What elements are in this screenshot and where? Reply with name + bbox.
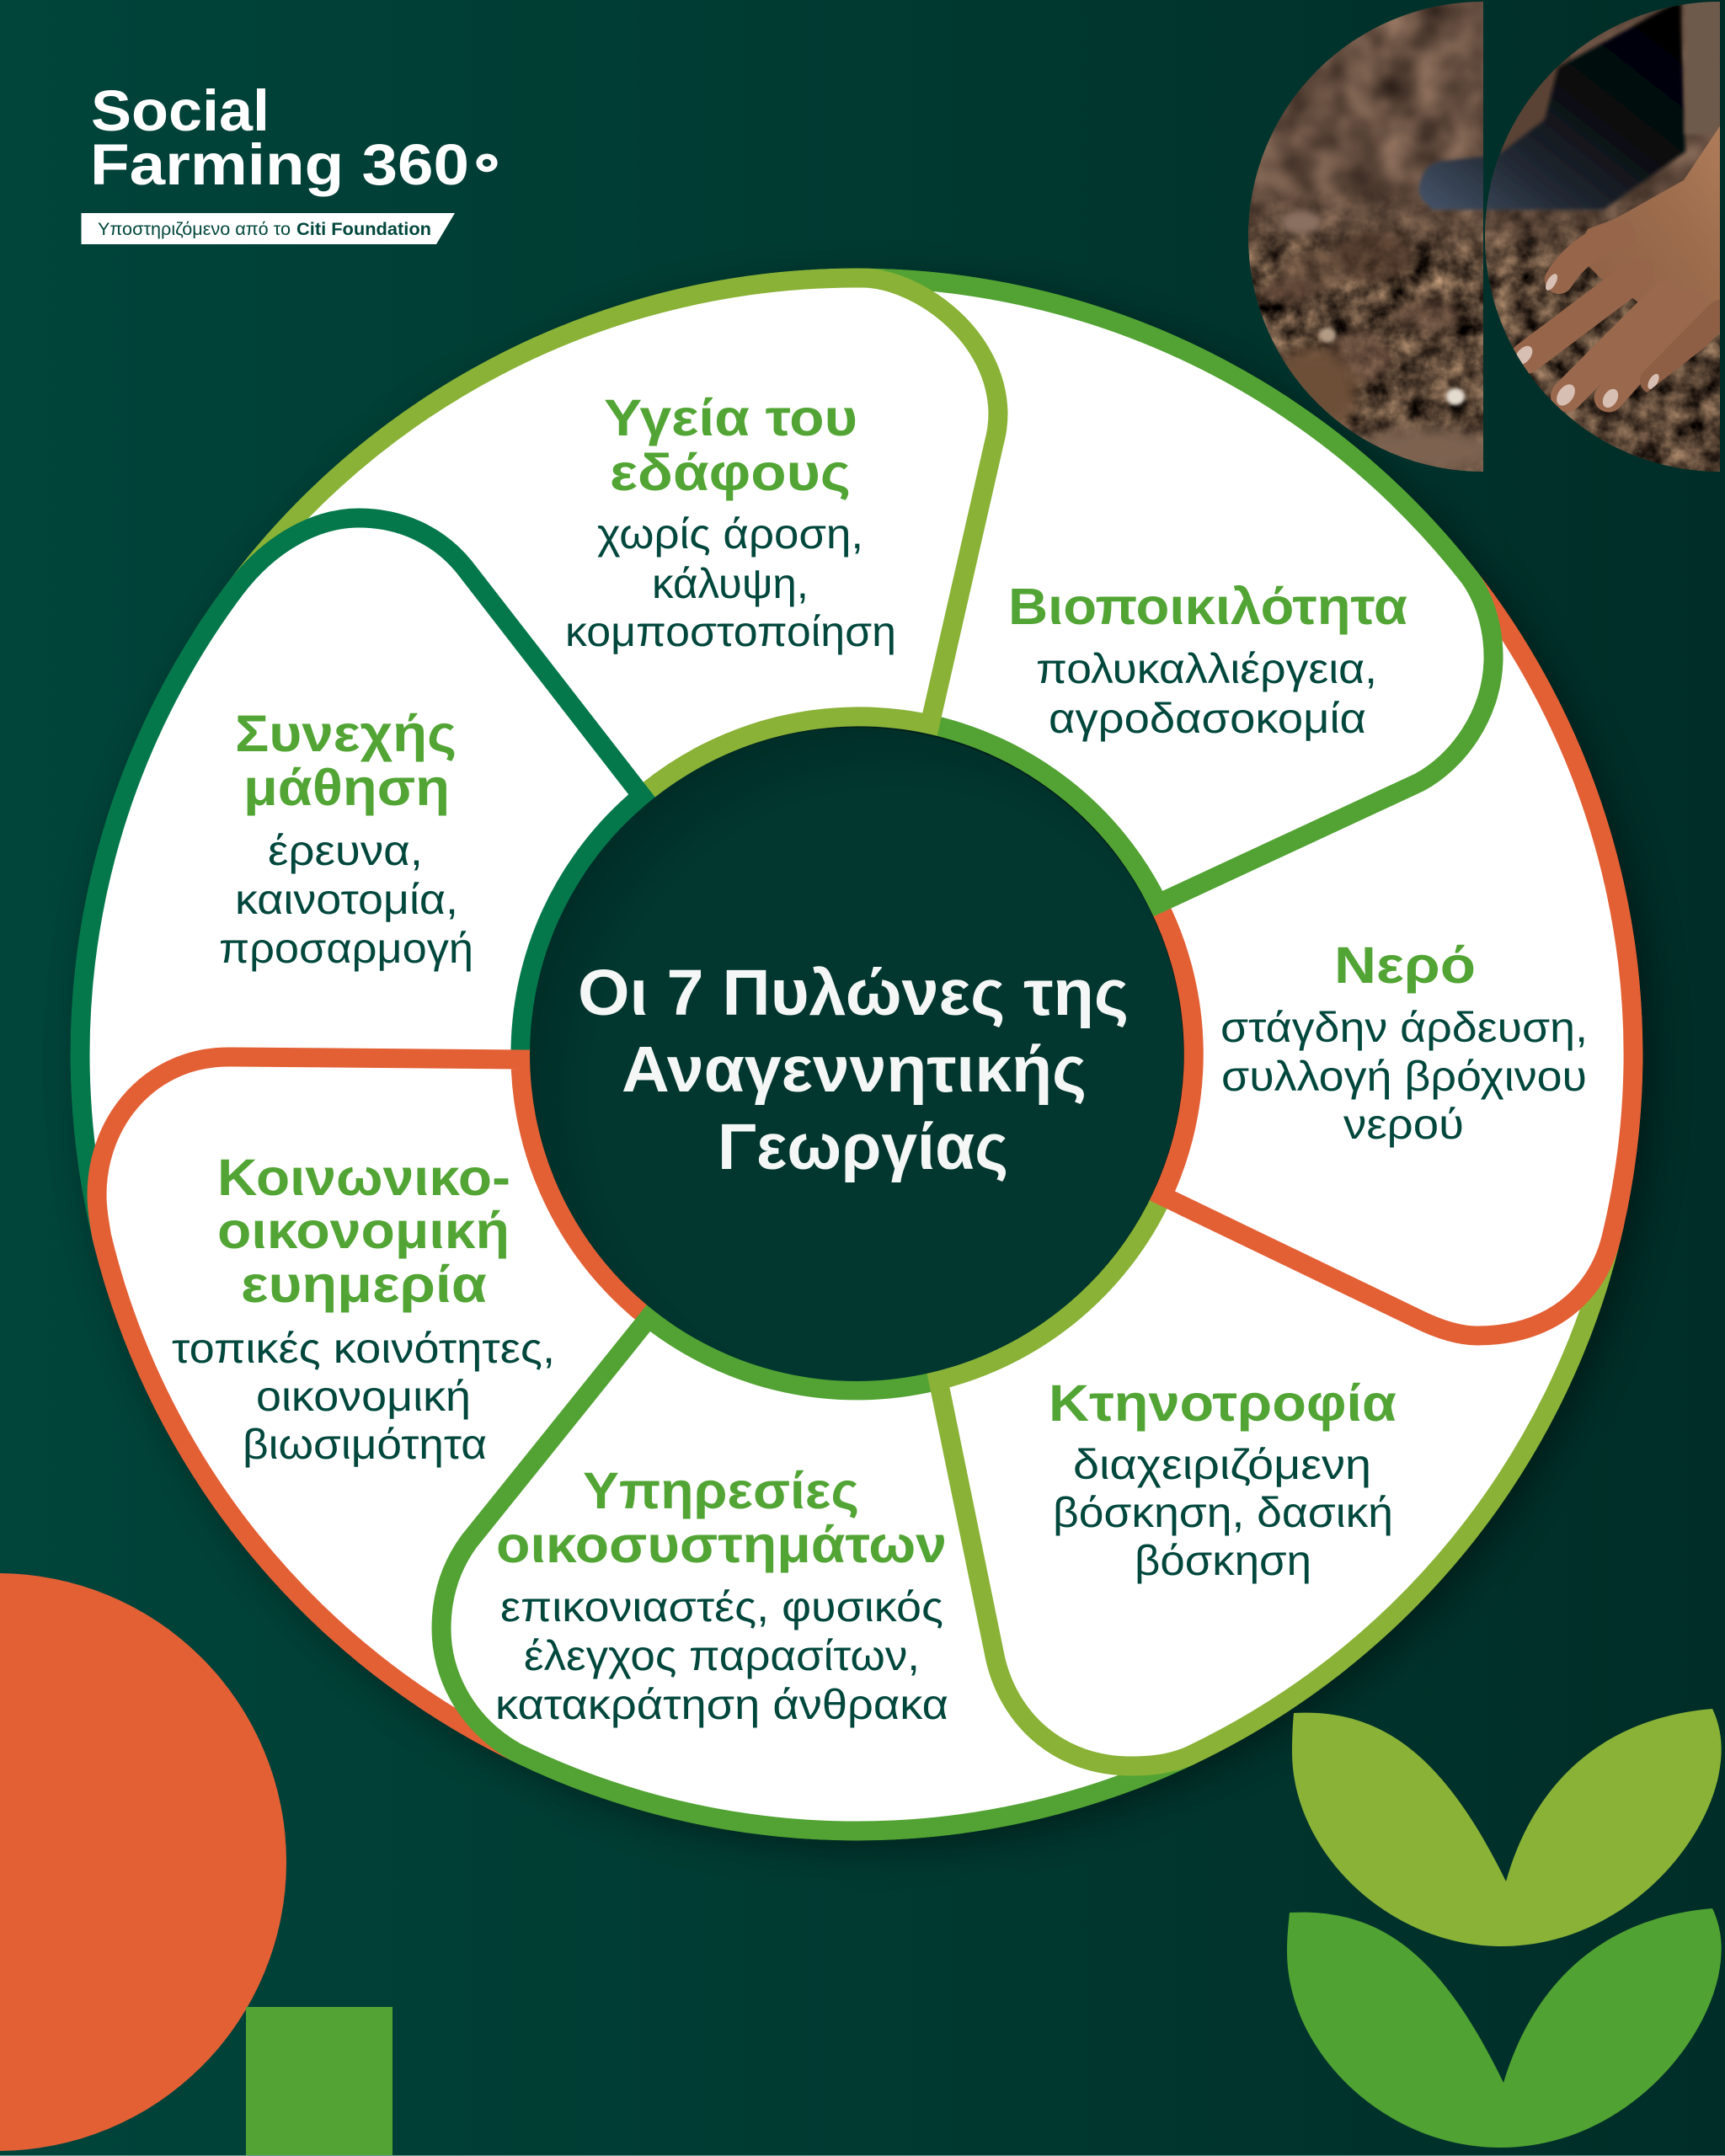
body: livestock: βόσκηση <box>1135 1537 1311 1584</box>
text block: soil health <box>565 389 896 655</box>
text block: continuous learning <box>219 705 473 972</box>
body: biodiversity: πολυκαλλιέργεια, <box>1036 645 1377 692</box>
segment outline: continuous learning <box>80 518 642 1236</box>
fingernails <box>1512 272 1661 410</box>
body: ecosystem services: έλεγχος παρασίτων, <box>524 1632 920 1679</box>
centre title <box>578 957 1129 1183</box>
centre title: Αναγεννητικής <box>622 1033 1087 1106</box>
body: soil health <box>565 510 896 655</box>
body: livestock <box>1053 1441 1393 1584</box>
body: continuous learning <box>219 827 473 972</box>
text block: water <box>1220 937 1588 1148</box>
heading: socio-economic prosperity: Κοινωνικο- <box>217 1149 510 1206</box>
heading: socio-economic prosperity: ευημερία <box>241 1256 487 1313</box>
pillar wheel <box>80 278 1633 1831</box>
body: continuous learning: καινοτομία, <box>235 876 458 923</box>
segment outline: soil health <box>211 278 998 796</box>
segment outline: water <box>1158 578 1633 1336</box>
heading: water: Νερό <box>1334 937 1476 994</box>
soil foreground texture <box>1248 189 1720 472</box>
heading: soil health: εδάφους <box>610 444 851 501</box>
body: ecosystem services <box>495 1583 948 1728</box>
text block: biodiversity <box>1008 578 1407 742</box>
body: continuous learning: προσαρμογή <box>219 925 473 972</box>
body: socio-economic prosperity: τοπικές κοινότητες, <box>172 1325 555 1372</box>
heading: continuous learning: Συνεχής <box>235 705 457 762</box>
body: water: νερού <box>1343 1101 1464 1148</box>
orange circle decoration <box>0 1573 286 2151</box>
leaf icon: upper light green <box>1292 1709 1722 1946</box>
heading: ecosystem services: οικοσυστημάτων <box>496 1516 947 1573</box>
wheel shadow <box>85 281 1652 1848</box>
logo wordmark <box>90 78 499 205</box>
body: continuous learning: έρευνα, <box>268 827 423 874</box>
body: soil health: κάλυψη, <box>652 560 809 607</box>
logo wordmark: Farming 360 <box>90 132 469 197</box>
body: soil health: χωρίς άροση, <box>597 510 863 558</box>
heading: biodiversity: Βιοποικιλότητα <box>1008 578 1407 635</box>
sponsor banner: Citi Foundation <box>296 220 431 239</box>
segment outline: livestock <box>938 1196 1611 1766</box>
body: water <box>1220 1004 1588 1148</box>
segment outline: ecosystem services <box>441 1318 1179 1831</box>
heading: livestock: Κτηνοτροφία <box>1049 1374 1397 1432</box>
sponsor banner <box>81 213 455 244</box>
text block: socio-economic prosperity <box>172 1149 555 1468</box>
body: socio-economic prosperity: βιωσιμότητα <box>243 1421 487 1468</box>
soil over fingertips <box>1575 320 1725 480</box>
body: soil health: κομποστοποίηση <box>565 608 896 655</box>
body: ecosystem services: επικονιαστές, φυσικός <box>500 1583 943 1630</box>
background soil right of boot <box>1685 0 1722 135</box>
leaf icon: lower green <box>1287 1908 1722 2148</box>
heading: ecosystem services: Υπηρεσίες <box>583 1462 859 1519</box>
logo wordmark: Social <box>91 78 270 143</box>
boot <box>1419 0 1685 210</box>
photo: hands in soil <box>1238 0 1725 480</box>
segment outline: biodiversity <box>842 278 1493 904</box>
body: ecosystem services: κατακράτηση άνθρακα <box>495 1681 948 1728</box>
text block: livestock <box>1049 1374 1397 1584</box>
logo <box>81 78 499 244</box>
body: livestock: διαχειριζόμενη <box>1073 1441 1371 1488</box>
text block: ecosystem services <box>495 1462 948 1728</box>
heading: soil health: Υγεία του <box>604 389 857 446</box>
logo wordmark: ° <box>474 142 499 205</box>
body: water: συλλογή βρόχινου <box>1221 1053 1587 1100</box>
body: socio-economic prosperity: οικονομική <box>256 1373 471 1420</box>
heading: socio-economic prosperity: οικονομική <box>217 1202 510 1259</box>
segment outline: socio-economic prosperity <box>97 1057 649 1753</box>
centre circle <box>530 728 1183 1381</box>
heading: socio-economic prosperity <box>217 1149 510 1313</box>
soil clods <box>1254 0 1571 474</box>
body: socio-economic prosperity <box>172 1325 555 1468</box>
segment outline: livestock overlap <box>927 1348 1348 1775</box>
centre title: Γεωργίας <box>718 1111 1008 1183</box>
heading: continuous learning <box>235 705 457 816</box>
body: livestock: βόσκηση, δασική <box>1053 1489 1393 1536</box>
sponsor banner: Υποστηριζόμενο από το <box>98 220 291 239</box>
heading: soil health <box>604 389 857 501</box>
body: biodiversity <box>1036 645 1377 742</box>
hand <box>1512 122 1722 410</box>
body: biodiversity: αγροδασοκομία <box>1049 695 1366 742</box>
body: water: στάγδην άρδευση, <box>1220 1004 1588 1051</box>
heading: continuous learning: μάθηση <box>243 759 450 816</box>
centre title: Οι 7 Πυλώνες της <box>578 957 1129 1029</box>
heading: ecosystem services <box>496 1462 947 1573</box>
green square decoration <box>246 2007 393 2155</box>
